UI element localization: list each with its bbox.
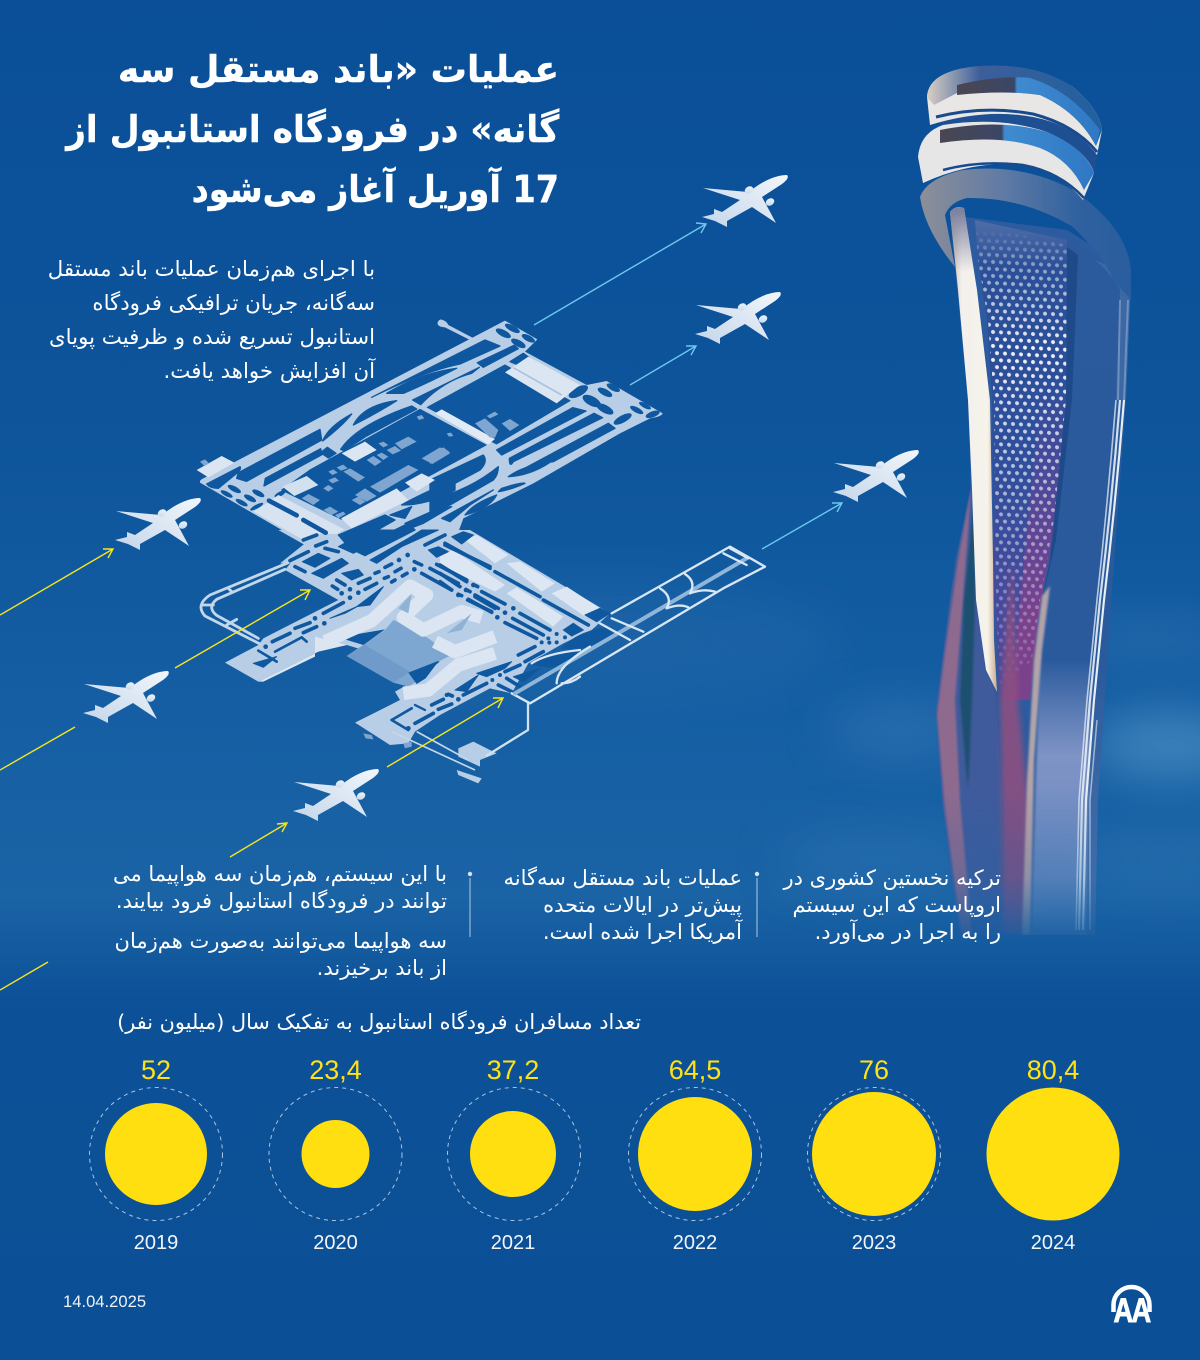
dotted panel — [975, 220, 1067, 700]
tower shaft — [950, 215, 1102, 891]
lower taxiway dots — [263, 553, 461, 731]
note: first in Europe: ترکیه نخستین کشوری در — [784, 866, 1001, 890]
upper taxiway cells — [207, 340, 529, 556]
note: first in Europe: اروپاست که این سیستم — [792, 893, 1001, 917]
plane 5 — [83, 671, 169, 723]
flight arrows: cyan departures — [534, 223, 842, 549]
plane 4 — [115, 498, 201, 550]
center pink ribbon — [1000, 560, 1030, 935]
title: 17 آوریل آغاز می‌شود — [191, 168, 559, 211]
upper aprons — [197, 442, 435, 540]
white band — [950, 207, 997, 692]
upper terminal buildings — [200, 415, 453, 518]
value labels: 52 — [141, 1055, 171, 1085]
note: three planes: سه هواپیما می‌توانند به‌صورت هم‌زمان — [115, 929, 447, 953]
year labels: 2021 — [491, 1232, 535, 1254]
lower apron slabs — [440, 535, 600, 627]
plane 6 — [293, 769, 379, 821]
plane 2 — [695, 292, 781, 344]
plane 1 top — [702, 175, 788, 227]
value labels — [141, 1055, 1079, 1085]
cream ribbon — [1022, 586, 1050, 935]
note: United States: پیش‌تر در ایالات متحده — [543, 893, 742, 917]
collar — [920, 169, 1131, 300]
value labels: 80,4 — [1027, 1055, 1079, 1085]
note: United States: آمریکا اجرا شده است. — [543, 920, 742, 944]
note: first in Europe — [782, 866, 1001, 944]
year labels: 2020 — [313, 1232, 358, 1254]
note: three planes: توانند در فرودگاه استانبول فرود بیایند. — [116, 889, 447, 913]
year labels — [134, 1232, 1075, 1254]
south-east dots — [445, 583, 567, 697]
value labels: 23,4 — [309, 1055, 362, 1085]
airport silhouettes — [200, 320, 663, 745]
bubble chart — [90, 1088, 1120, 1220]
value labels: 37,2 — [487, 1055, 539, 1085]
date: 14.04.2025 — [63, 1292, 146, 1311]
bubble 2023 — [808, 1088, 940, 1220]
left ribbons — [936, 485, 1002, 940]
bubble 2019 — [90, 1088, 222, 1220]
east runway — [512, 547, 765, 703]
year labels: 2024 — [1031, 1232, 1075, 1254]
chart heading: تعداد مسافران فرودگاه استانبول به تفکیک سال (میلیون نفر) — [117, 1010, 641, 1034]
bubble 2021 — [448, 1088, 580, 1220]
note: United States — [504, 866, 743, 944]
note: three planes — [113, 862, 447, 980]
lower terminal apron — [258, 586, 497, 783]
upper terminal interior — [282, 365, 570, 519]
bubble 2020 — [269, 1088, 402, 1220]
intro text: سه‌گانه، جریان ترافیکی فرودگاه — [92, 291, 375, 316]
year labels: 2023 — [852, 1232, 896, 1254]
east taxiway cells — [430, 408, 615, 522]
intro text: استانبول تسریع شده و ظرفیت پویای — [49, 325, 375, 350]
bubble 2024 — [986, 1088, 1120, 1220]
title — [64, 48, 560, 212]
intro text — [48, 257, 376, 384]
intro text: با اجرای هم‌زمان عملیات باند مستقل — [48, 257, 375, 282]
bubble 2022 — [628, 1088, 762, 1220]
left loop taxiway — [201, 563, 288, 644]
south-east cells — [452, 532, 613, 692]
note: first in Europe: را به اجرا در می‌آورد. — [815, 920, 1001, 944]
year labels: 2019 — [134, 1232, 178, 1254]
ring backing — [938, 114, 1098, 174]
lower periwinkle — [1033, 670, 1092, 916]
north-east aprons and buildings — [430, 357, 580, 464]
airport diagram — [197, 320, 765, 783]
value labels: 64,5 — [669, 1055, 721, 1085]
upper taxiway end cells — [220, 322, 661, 512]
note: three planes: از باند برخیزند. — [317, 956, 447, 980]
control tower — [918, 66, 1131, 940]
lower taxiway slots — [258, 535, 495, 740]
column separators — [468, 872, 759, 937]
plane 3 — [833, 450, 919, 502]
note: three planes: با این سیستم، هم‌زمان سه هواپیما می — [113, 862, 447, 886]
title: عملیات «باند مستقل سه — [118, 48, 559, 91]
value labels: 76 — [859, 1055, 889, 1085]
upper ring — [927, 84, 1102, 155]
AA logo: AA — [1113, 1291, 1151, 1330]
intro text: آن افزایش خواهد یافت. — [164, 359, 375, 384]
note: United States: عملیات باند مستقل سه‌گانه — [504, 866, 742, 890]
south-east slots — [440, 543, 588, 695]
lower taxiway cells — [253, 530, 448, 667]
lower ring — [918, 122, 1094, 200]
connector taxiway — [486, 703, 528, 756]
title: گانه» در فرودگاه استانبول از — [66, 108, 559, 151]
year labels: 2022 — [673, 1232, 717, 1254]
right white streaks — [1076, 300, 1128, 930]
flight arrows: yellow arrivals — [0, 549, 503, 990]
right panel — [1031, 299, 1130, 926]
